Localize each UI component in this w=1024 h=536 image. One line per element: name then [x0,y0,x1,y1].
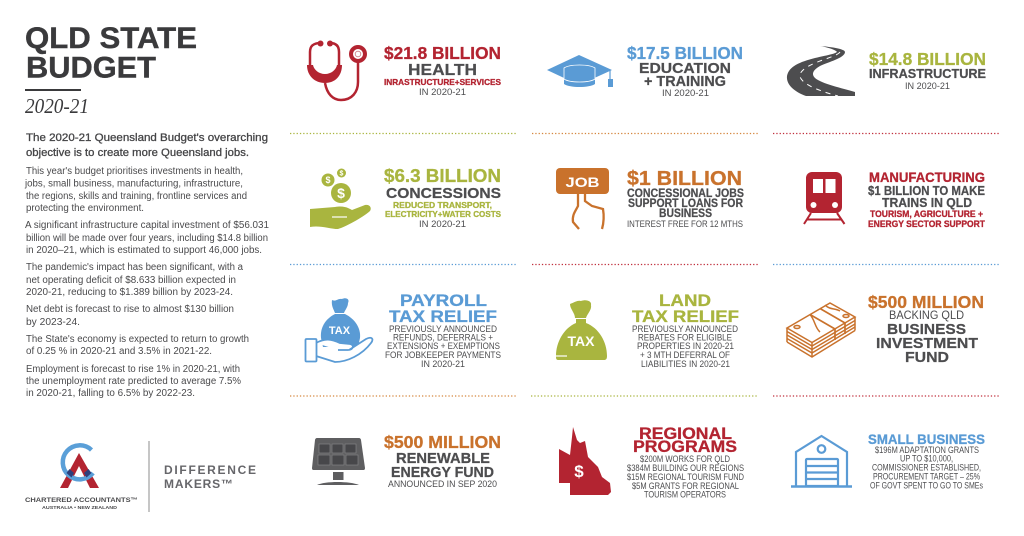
icon: Queensland map: $ [574,462,584,481]
renewable energy text: ANNOUNCED IN SEP 2020 [388,479,497,490]
icon: job button with pointing hand [556,168,609,229]
jobs text [627,167,744,230]
small business text: SMALL BUSINESS [868,431,985,447]
payroll tax relief text: FOR JOBKEEPER PAYMENTS [385,350,501,361]
small business text: OF GOVT SPENT TO GO TO SMEs [870,480,983,490]
education text: EDUCATION [639,60,731,77]
renewable energy text: ENERGY FUND [391,465,494,481]
logo: Chartered Accountants: CHARTERED ACCOUNTANTS™ [25,497,138,504]
icon: train [804,172,844,224]
intro text block [24,132,269,399]
concessions text: $6.3 BILLION [384,166,501,186]
logo: Chartered Accountants: AUSTRALIA • NEW ZEALAND [42,505,118,510]
manufacturing text: TOURISM, AGRICULTURE + [870,209,983,219]
business investment fund text: BUSINESS [887,321,966,338]
land tax relief text: TAX RELIEF [632,307,739,326]
intro text block: by 2023-24. [26,317,80,328]
icon: stack of cash [787,303,855,357]
health text: HEALTH [408,62,477,79]
education text: $17.5 BILLION [627,43,743,63]
logo: Difference Makers: DIFFERENCE [164,463,256,477]
icon: Queensland map [559,427,611,495]
health text: IN 2020-21 [419,87,466,98]
panel: renewable energy [312,432,501,490]
intro text block: The State's economy is expected to return to growth [26,334,249,345]
logo: Chartered Accountants [25,445,138,510]
logo: Difference Makers: MAKERS™ [164,477,233,491]
intro text block: the unemployment rate predicted to average 7.5% [26,376,241,387]
title [25,22,197,84]
business investment fund text: $500 MILLION [868,292,984,312]
regional programs text: $384M BUILDING OUR REGIONS [627,463,744,474]
payroll tax relief text: REFUNDS, DEFERRALS + [393,332,493,344]
small business text: PROCUREMENT TARGET – 25% [873,472,980,482]
intro text block: net operating deficit of $8.633 billion expected in [26,275,236,286]
icon: hand with coins: $ [325,175,331,185]
icon: tax bag on hand [306,298,372,362]
icon: warehouse [791,436,852,486]
manufacturing text: MANUFACTURING [869,169,985,185]
payroll tax relief text: EXTENSIONS + EXEMPTIONS [387,341,500,352]
renewable energy text: $500 MILLION [384,432,501,452]
payroll tax relief text: PREVIOUSLY ANNOUNCED [389,324,497,335]
icon: graduation cap [547,55,613,87]
intro text block: The 2020-21 Queensland Budget's overarching [26,132,268,144]
manufacturing text: TRAINS IN QLD [882,196,972,210]
payroll tax relief text: IN 2020-21 [421,359,465,370]
intro text block: 2020-21, reducing to $1.389 billion by 2023-24. [26,287,233,298]
infrastructure text: INFRASTRUCTURE [869,66,986,81]
icon: hand with coins [310,168,371,229]
icon: hand with coins: $ [340,170,344,178]
panel: small business [791,431,985,490]
icon: tax bag [556,300,607,360]
panel: jobs [556,167,744,230]
infrastructure text: IN 2020-21 [905,81,950,92]
intro text block: objective is to create more Queensland jobs. [26,147,249,159]
intro text block: A significant infrastructure capital investment of $56.031 [25,220,269,231]
concessions text [384,166,501,230]
land tax relief text: REBATES FOR ELIGIBLE [638,332,732,344]
intro text block: of 0.25 % in 2020-21 and 3.5% in 2021-22. [26,346,212,357]
intro text block: in 2020–21, which is estimated to support 46,000 jobs. [26,245,262,256]
panel: regional programs [559,425,744,500]
manufacturing text: $1 BILLION TO MAKE [868,184,985,198]
renewable energy text [384,432,501,490]
jobs text: INTEREST FREE FOR 12 MTHS [627,219,743,230]
small business text [868,431,985,490]
logo: Difference Makers [164,463,256,491]
icon: hand with coins: $ [337,185,345,201]
business investment fund text: BACKING QLD [889,310,964,322]
concessions text: REDUCED TRANSPORT, [393,200,492,210]
payroll tax relief text: PAYROLL [400,291,487,310]
icon: job button with pointing hand: JOB [566,174,600,190]
regional programs text: $5M GRANTS FOR REGIONAL [632,481,739,492]
regional programs text: $200M WORKS FOR QLD [640,454,730,465]
business investment fund text [868,292,984,366]
icon: tax bag on hand: TAX [329,325,351,337]
manufacturing text [868,169,985,229]
regional programs text: $15M REGIONAL TOURISM FUND [627,472,744,483]
land tax relief text: PREVIOUSLY ANNOUNCED [632,324,738,335]
small business text: $196M ADAPTATION GRANTS [875,445,979,455]
jobs text: BUSINESS [659,208,712,220]
panel: infrastructure [787,46,986,96]
panel: health [307,40,501,100]
land tax relief text: LAND [659,291,711,310]
intro text block: Employment is forecast to rise 1% in 2020-21, with [26,364,240,375]
health text: INRASTRUCTURE+SERVICES [384,77,501,87]
jobs text: SUPPORT LOANS FOR [628,198,744,210]
health text: $21.8 BILLION [384,43,501,63]
concessions text: ELECTRICITY+WATER COSTS [385,209,501,219]
title: QLD STATE [25,22,197,55]
land tax relief text: PROPERTIES IN 2020-21 [637,341,734,352]
education text: + TRAINING [644,73,726,90]
manufacturing text: ENERGY SECTOR SUPPORT [868,219,985,229]
health text [384,43,501,98]
panel: concessions [310,166,501,230]
infrastructure text: $14.8 BILLION [869,49,986,69]
business investment fund text: FUND [905,349,949,366]
regional programs text: TOURISM OPERATORS [644,490,726,500]
intro text block: protecting the environment. [26,203,144,214]
icon: road [787,46,855,96]
education text: IN 2020-21 [662,88,709,99]
payroll tax relief text [385,291,501,370]
icon: solar panel [312,438,365,485]
jobs text: $1 BILLION [627,167,742,190]
small business text: UP TO $10,000, [900,454,953,464]
concessions text: CONCESSIONS [386,185,501,202]
subtitle: year: 2020-21 [25,94,89,118]
payroll tax relief text: TAX RELIEF [389,307,497,326]
infrastructure text [869,49,986,92]
icon: tax bag: TAX [568,333,595,349]
land tax relief text [632,291,739,370]
intro text block: billion will be made over four years, including $14.8 billion [26,233,268,244]
intro text block: This year's budget prioritises investments in health, [26,166,243,177]
intro text block: the regions, skills and training, frontline services and [26,191,247,202]
renewable energy text: RENEWABLE [396,451,490,467]
intro text block: The pandemic's impact has been significant, with a [26,262,243,273]
intro text block: in 2020-21, falling to 6.5% by 2022-23. [26,388,195,399]
icon: stethoscope [307,40,365,100]
regional programs text: REGIONAL [639,425,732,443]
small business text: COMMISSIONER ESTABLISHED, [872,462,981,472]
panel: land tax relief [556,291,739,370]
regional programs text: PROGRAMS [633,438,737,456]
panel: payroll tax relief [306,291,501,370]
panel: business investment fund [787,292,984,366]
business investment fund text: INVESTMENT [876,335,978,352]
land tax relief text: LIABILITIES IN 2020-21 [641,359,730,370]
panel: education [547,43,743,99]
regional programs text [627,425,744,500]
concessions text: IN 2020-21 [419,219,466,230]
land tax relief text: + 3 MTH DEFERRAL OF [640,350,730,361]
intro text block: jobs, small business, manufacturing, infrastructure, [24,178,243,190]
education text [627,43,743,99]
panel: manufacturing [804,169,985,229]
title: BUDGET [26,52,156,84]
intro text block: Net debt is forecast to rise to almost $130 billion [26,304,234,315]
jobs text: CONCESSIONAL JOBS [627,188,744,200]
